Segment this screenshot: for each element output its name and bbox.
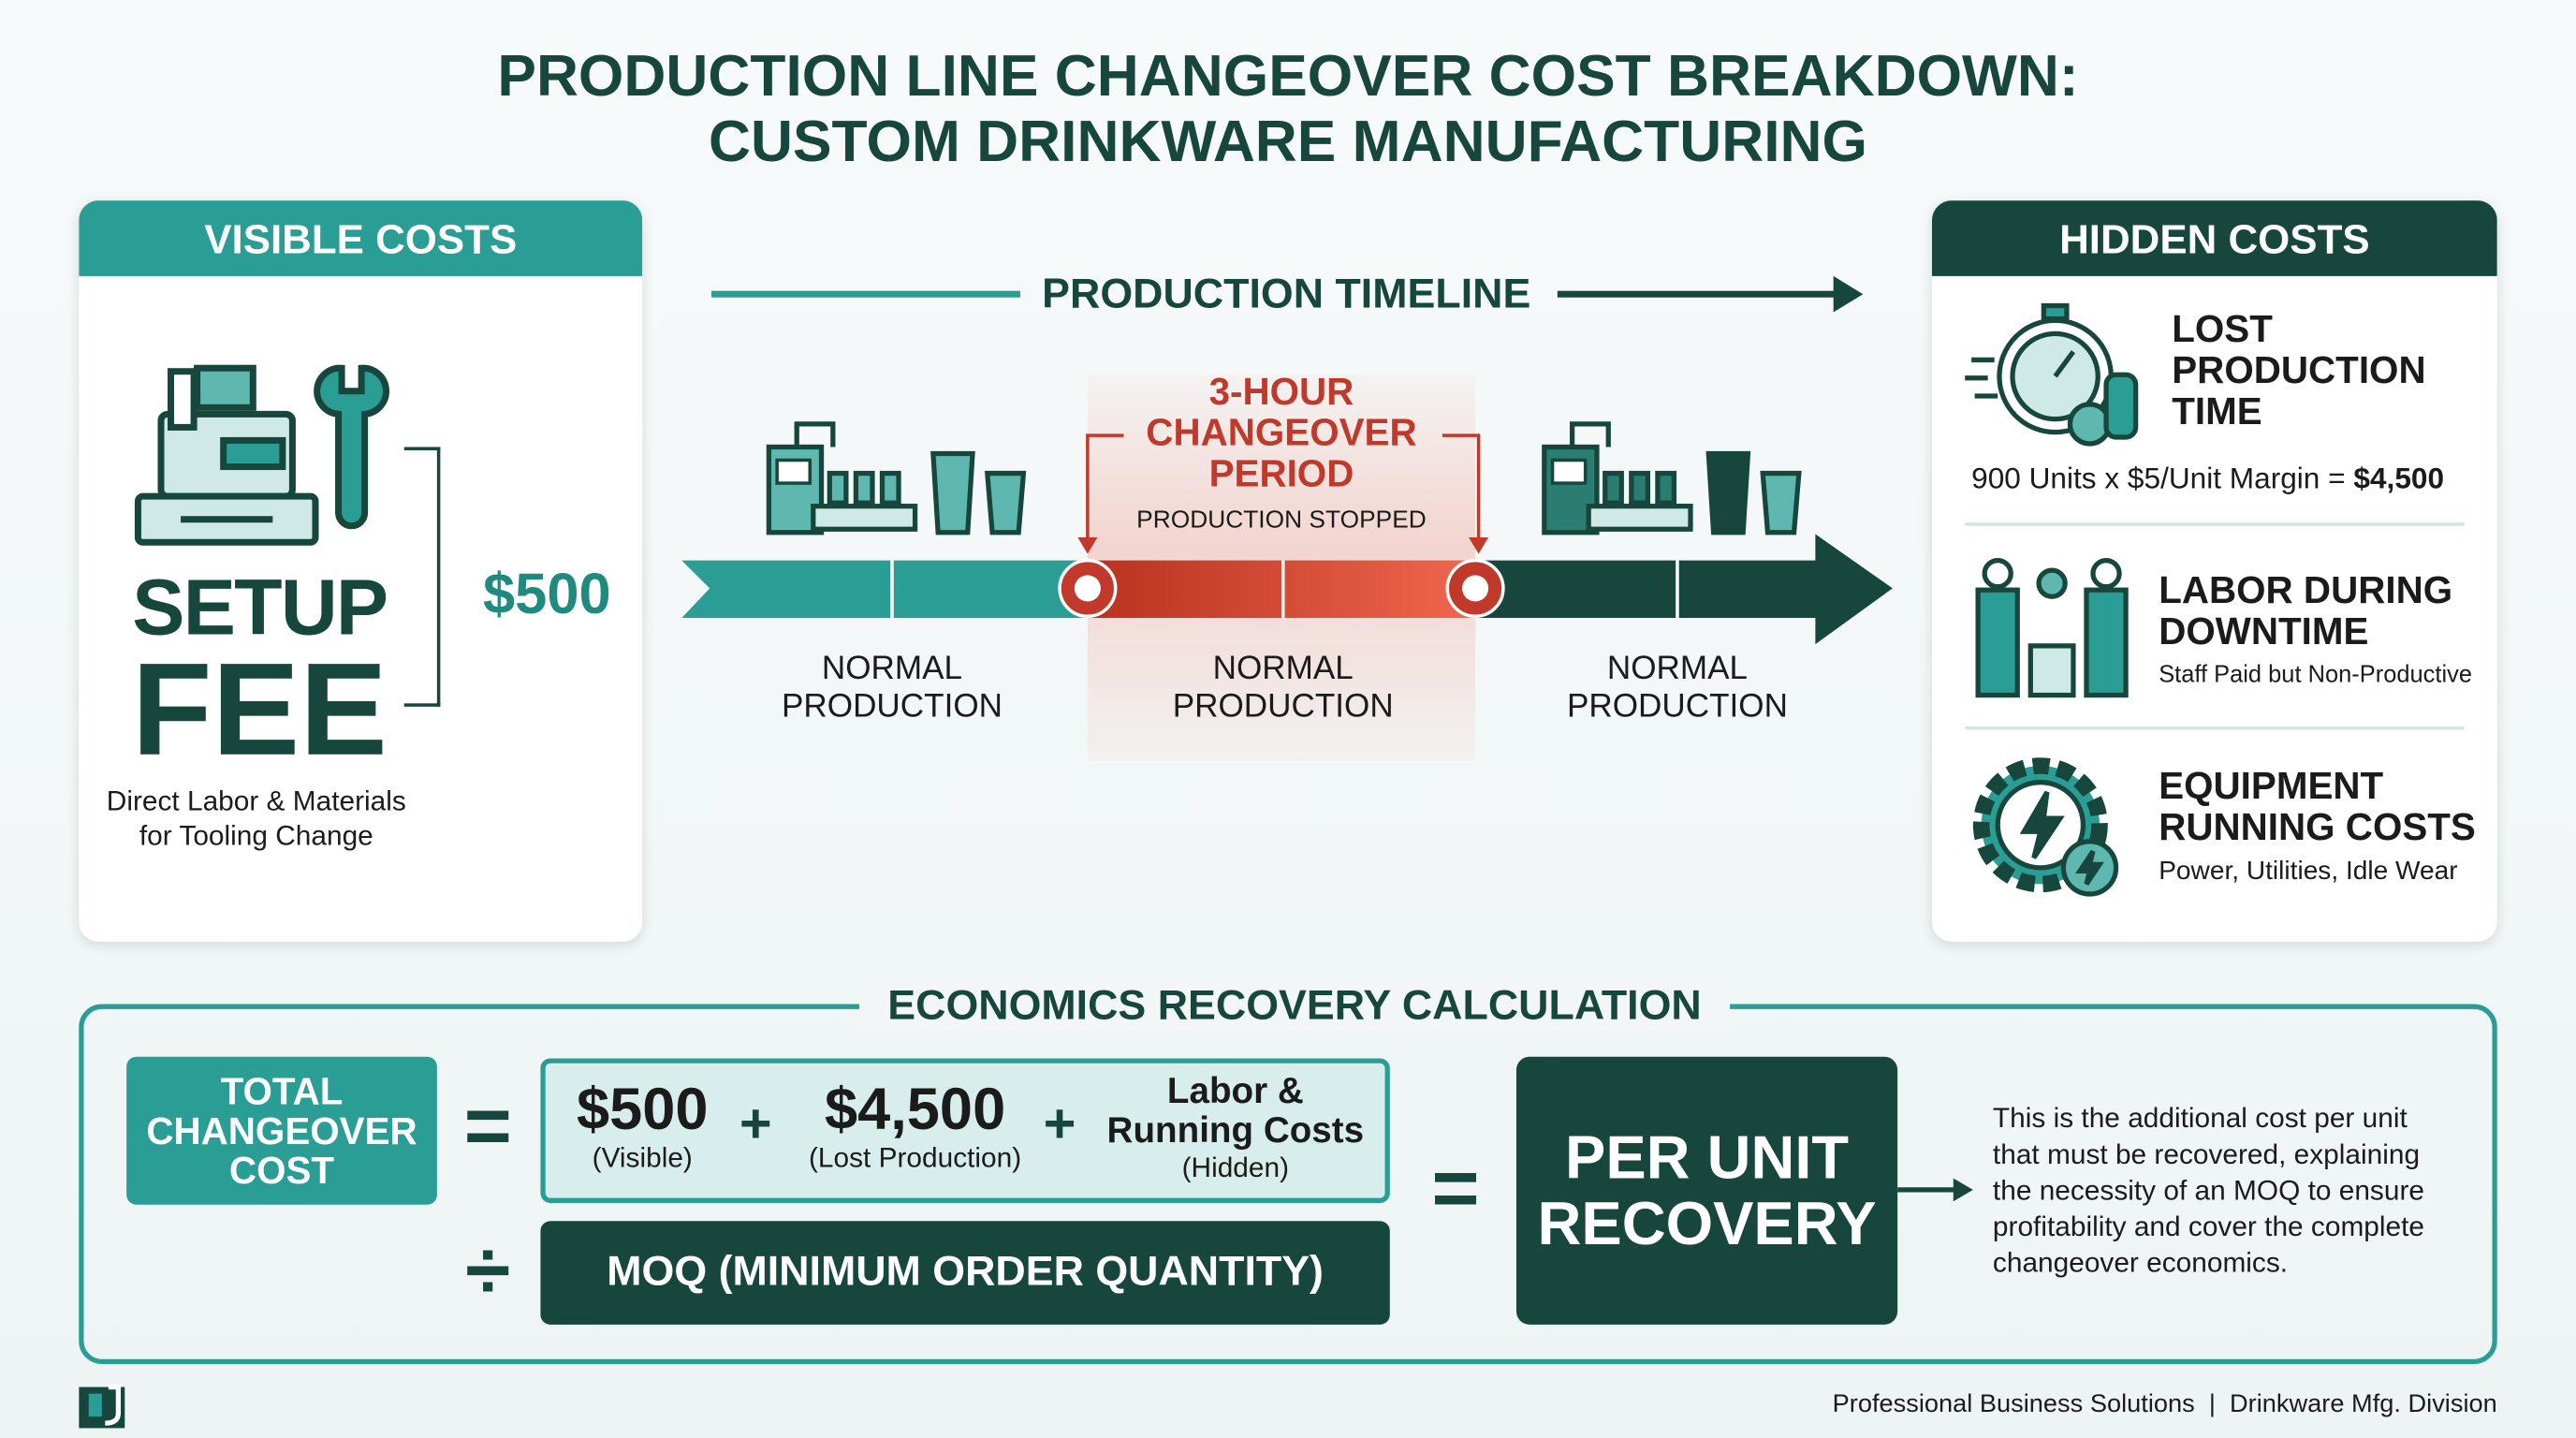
text: NORMAL <box>1213 651 1354 687</box>
text: production stopped: PRODUCTION STOPPED <box>1136 506 1427 535</box>
text: lost production time: LOST <box>2172 307 2273 350</box>
box: per unit recovery <box>1516 1057 1897 1325</box>
box: per unit recovery: PER UNIT <box>1565 1124 1849 1192</box>
box: total changeover cost: COST <box>229 1149 334 1192</box>
panel: hidden costs <box>1932 200 2497 942</box>
text: power utilities: Power, Utilities, Idle Wear <box>2159 858 2458 886</box>
icon: stopwatch <box>1965 303 2138 447</box>
text: explanation: This is the additional cost per unit that must be recovered, explaining the necessity of an MOQ to ensure profitability and cover the complete changeover economics. <box>1993 1103 2424 1279</box>
text: description: Direct Labor & Materials <box>107 785 406 816</box>
icon: workers <box>1975 558 2129 698</box>
panel: visible costs <box>79 200 642 942</box>
box: sum of costs: $500 <box>577 1075 709 1142</box>
equals sign: = <box>464 1079 512 1172</box>
text: NORMAL <box>1607 651 1748 687</box>
text: changeover period <box>1146 370 1417 494</box>
box: sum of costs: (Visible) <box>593 1142 693 1173</box>
box: sum of costs: (Hidden) <box>1182 1152 1289 1183</box>
icon: cash register and wrench <box>135 365 389 546</box>
title: CUSTOM DRINKWARE MANUFACTURING <box>709 109 1867 174</box>
box: sum of costs: (Lost Production) <box>809 1142 1021 1173</box>
text: equipment running costs: RUNNING COSTS <box>2159 805 2476 848</box>
text: description: for Tooling Change <box>139 820 373 851</box>
text: labor during downtime: LABOR DURING <box>2159 568 2452 611</box>
text: labor during downtime: DOWNTIME <box>2159 609 2368 653</box>
text: lost production time <box>2172 307 2426 433</box>
box: total changeover cost <box>126 1057 437 1205</box>
box: moq: MOQ (MINIMUM ORDER QUANTITY) <box>607 1249 1324 1295</box>
text: labor during downtime <box>2159 568 2452 653</box>
text: PRODUCTION <box>1567 689 1788 725</box>
footer logo <box>79 1385 125 1429</box>
text: setup fee: SETUP <box>132 565 387 653</box>
bracket arrows <box>1077 433 1488 554</box>
box: sum of costs: Running Costs <box>1107 1109 1364 1151</box>
box: per unit recovery: RECOVERY <box>1537 1190 1877 1257</box>
text: PRODUCTION <box>1173 689 1394 725</box>
icon: machine right <box>1542 421 1802 536</box>
footer text: Professional Business Solutions | Drinkware Mfg. Division <box>1833 1390 2497 1418</box>
title: PRODUCTION LINE CHANGEOVER COST BREAKDOWN: <box>497 43 2079 109</box>
heading: visible costs: VISIBLE COSTS <box>204 217 517 263</box>
box: total changeover cost: CHANGEOVER <box>146 1109 417 1152</box>
box: sum of costs <box>540 1058 1390 1203</box>
text: equipment running costs <box>2159 764 2476 848</box>
panel: economics recovery calculation <box>79 1005 2497 1364</box>
box: moq <box>540 1221 1390 1325</box>
equals sign 2: = <box>1431 1142 1480 1234</box>
panel: visible costs: FEE <box>132 636 388 783</box>
labels: normal production: PRODUCTION <box>782 689 1003 725</box>
labels: normal production: NORMAL <box>822 651 962 687</box>
box: sum of costs: + <box>739 1093 772 1155</box>
text: changeover period: CHANGEOVER <box>1146 411 1417 453</box>
text: changeover period: PERIOD <box>1209 452 1354 494</box>
box: sum of costs: $4,500 <box>825 1075 1005 1142</box>
heading: hidden costs: HIDDEN COSTS <box>2059 217 2370 263</box>
timeline bar <box>681 534 1893 644</box>
heading: production timeline <box>711 271 1863 317</box>
heading: hidden costs <box>1932 200 2497 276</box>
box: total changeover cost: TOTAL <box>221 1070 343 1112</box>
text: equipment running costs: EQUIPMENT <box>2159 764 2383 807</box>
bracket <box>404 447 440 707</box>
heading: production timeline: PRODUCTION TIMELINE <box>1042 271 1530 317</box>
icon: gear with bolt <box>1973 757 2119 897</box>
arrow <box>1897 1178 1973 1202</box>
text: staff paid: Staff Paid but Non-Productive <box>2159 662 2472 689</box>
heading: economics recovery: ECONOMICS RECOVERY CALCULATION <box>887 983 1702 1029</box>
text: lost production formula: 900 Units x $5/Unit Margin = $4,500 <box>1971 462 2444 494</box>
labels: normal production <box>782 651 1003 725</box>
text: lost production time: PRODUCTION <box>2172 348 2426 391</box>
text: changeover period: 3-HOUR <box>1209 370 1354 413</box>
text: description <box>107 785 406 851</box>
divide sign: ÷ <box>465 1225 510 1316</box>
title <box>497 43 2079 174</box>
box: sum of costs: Labor & <box>1167 1070 1304 1111</box>
icon: machine left <box>766 421 1026 536</box>
red changeover shade <box>1088 374 1475 761</box>
box: sum of costs: + <box>1044 1093 1076 1155</box>
value: $500: $500 <box>483 562 611 626</box>
text: lost production time: TIME <box>2172 389 2262 433</box>
heading: visible costs <box>79 200 642 276</box>
